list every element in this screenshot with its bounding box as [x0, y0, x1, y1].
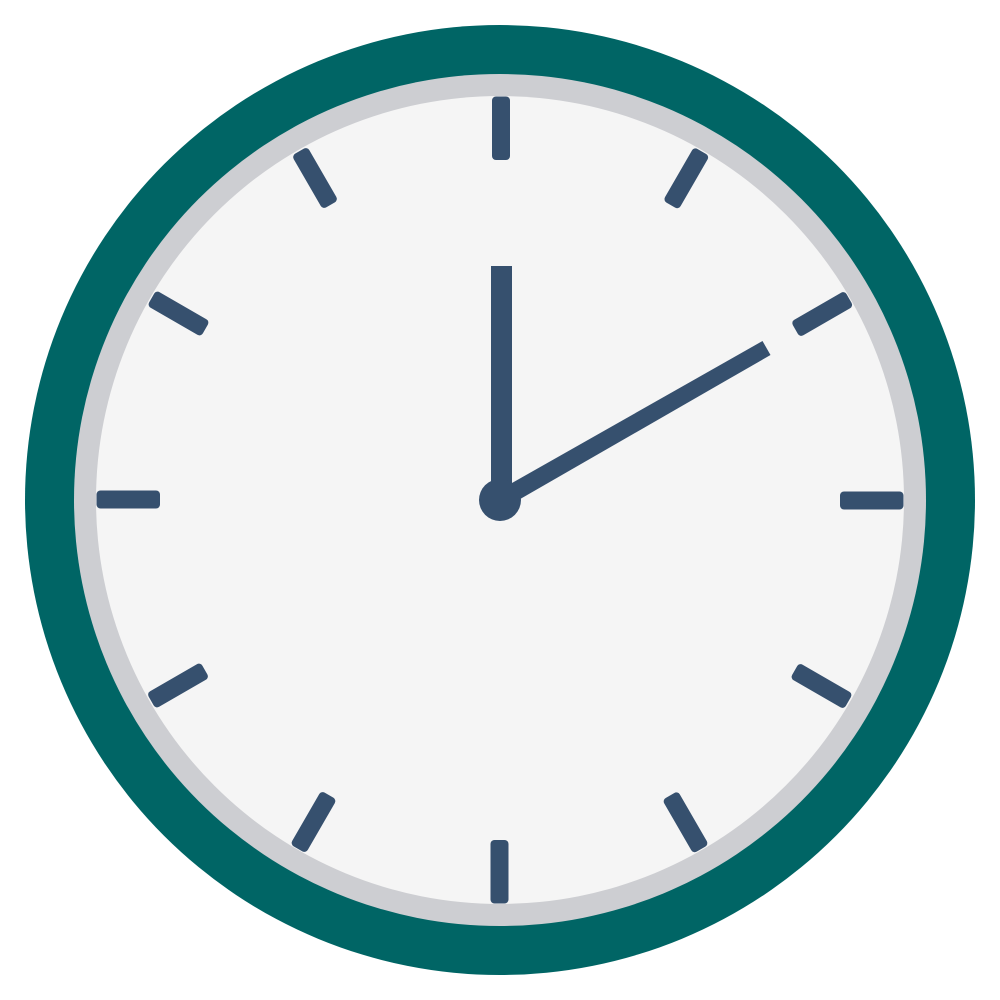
center pivot — [479, 479, 521, 521]
hour tick marks — [96, 96, 904, 904]
minute hand — [491, 266, 512, 500]
clock inner bezel — [74, 74, 926, 926]
clock face — [96, 96, 904, 904]
hour hand — [505, 341, 770, 502]
